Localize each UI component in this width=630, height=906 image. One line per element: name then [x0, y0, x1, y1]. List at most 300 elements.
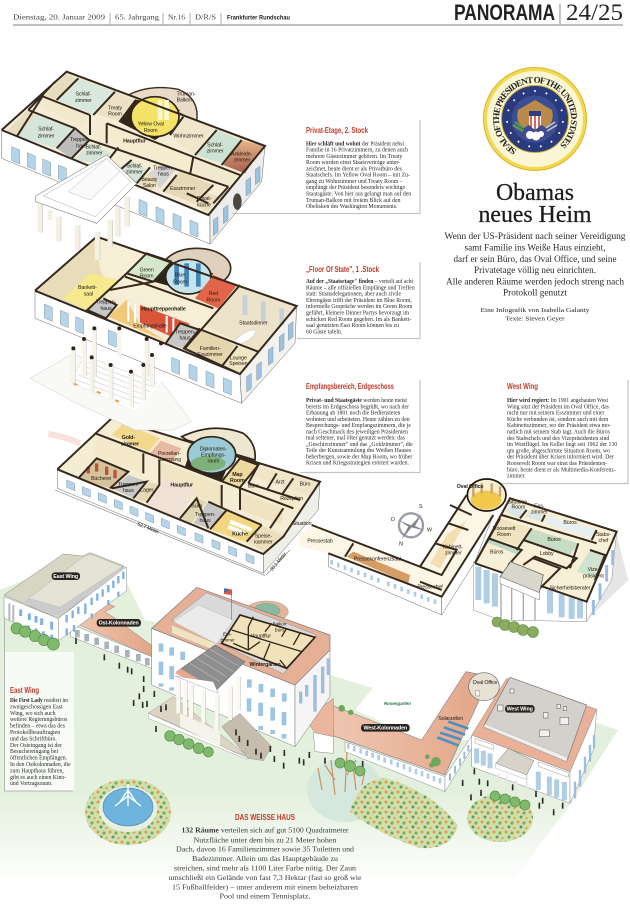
body text Privat-Etage: Truman-Balkon mit freiem Blick auf den — [306, 197, 401, 204]
East Wing building — [4, 553, 153, 668]
floor-2 room labels: Ankleide- — [231, 152, 253, 158]
west wing room labels: Situation — [508, 499, 527, 505]
west colonnade junction roof — [306, 698, 333, 737]
round flower bed by West Wing — [467, 791, 533, 842]
body text West Wing: natlich mit seinem Stab tagt. Auch die Büros — [507, 430, 611, 436]
floor-2 rooms — [7, 73, 263, 212]
heading Privat-Etage: Privat-Etage, 2. Stock — [306, 125, 368, 135]
portico — [175, 645, 245, 730]
compass letters: W — [427, 528, 433, 534]
map room — [222, 458, 258, 487]
pink shadow stripes — [48, 434, 80, 443]
title: neues Heim — [478, 202, 592, 228]
floor-1 room labels: Red — [209, 291, 218, 297]
floor-2 room labels: Beauty — [141, 177, 158, 183]
floor-1 room labels: Bankett- — [78, 285, 97, 291]
balcony arc — [182, 428, 255, 460]
ground-floor room labels: Bücherei — [91, 476, 111, 482]
credits — [480, 307, 590, 322]
floor-1 room labels — [78, 267, 268, 367]
intro text: Protokoll genutzt — [503, 288, 567, 298]
body text Empfangsbereich: Privat- und Staatsgäste werden heute meist — [306, 398, 407, 404]
corridor back rooms — [93, 437, 143, 473]
rear dome — [245, 601, 288, 622]
body text East Wing: Die First Lady residiert im — [10, 698, 68, 704]
east rooms — [248, 467, 320, 497]
floor-1 room labels: Blue — [175, 273, 185, 279]
west wing rooms — [505, 505, 527, 518]
floor-2 front wall — [2, 131, 210, 244]
floor-1 room labels: haus — [100, 306, 112, 312]
colonnade roof — [327, 672, 490, 775]
body text East Wing: und Vortragsraum. — [10, 781, 53, 787]
cutaway labels: Büro — [275, 628, 285, 633]
west wing room labels: Stabs- — [596, 532, 611, 538]
cross hall red carpet — [140, 305, 190, 336]
bare trees by the south lawn — [318, 752, 365, 795]
floor-2 room labels: haus — [76, 143, 88, 149]
entrance hall — [110, 277, 217, 328]
colonnade walls — [312, 495, 493, 597]
small room — [180, 498, 207, 523]
entrance ground plane — [30, 353, 192, 430]
ground-floor room labels: haus — [199, 518, 211, 524]
label: Rosengarten: Rosengarten — [384, 701, 411, 706]
label: Kabinettszimmer: Kabinett- — [443, 544, 463, 550]
label: West Wing: West Wing — [507, 707, 533, 713]
compass letters: S — [419, 504, 423, 510]
lawn — [0, 565, 618, 885]
west wing roof base — [472, 678, 597, 772]
west wing tall windows — [477, 748, 564, 800]
floor-2 room labels: Schlaf- — [207, 142, 223, 148]
body text Empfangsbereich: wohnten und arbeiteten. Heute zählen zu den — [306, 417, 410, 423]
colonnade arcade — [71, 624, 152, 668]
ground-floor front wall — [57, 469, 263, 573]
body text Floor of State: Ehrengäste trifft der Präsident im Blue Room, — [306, 297, 412, 304]
floor-2 room labels: Wohnzimmer — [173, 133, 204, 139]
floor-1 room labels: Treppen- — [96, 300, 117, 306]
floor-2 side wall — [210, 146, 265, 244]
small kitchen — [223, 346, 257, 374]
dimension: building width: 30,1 Meter — [269, 551, 288, 573]
body text Empfangsbereich: „Geschirrzimmer" und das „Goldzimmer", die — [306, 442, 413, 448]
newspaper header — [13, 0, 623, 25]
west wing room labels: Roosevelt — [493, 526, 516, 532]
floor-2 room labels: Truman- — [176, 91, 196, 97]
body text Das Weisse Haus: Nutzfläche unter dem bis zu 21 Meter hohen — [194, 835, 337, 844]
floor-1 room labels: Lounge — [230, 355, 247, 361]
body text Das Weisse Haus: Badezimmer. Allein um das Hauptgebäude zu — [192, 854, 338, 863]
west wing room labels: Büros — [547, 537, 561, 543]
ground-floor room labels: zimmer — [121, 441, 139, 447]
west wing room labels: zimmer — [531, 509, 548, 515]
bottom text block — [168, 812, 362, 901]
body text Privat-Etage: Room wurden einst Staatsverträge unter- — [306, 160, 400, 166]
kitchen — [210, 510, 262, 542]
label: Oval Office: Oval Office — [457, 484, 483, 490]
body text Floor of State: geführt, kleinere Dinner Partys bevorzugt im — [306, 310, 410, 316]
oval office roof: Oval Office — [473, 680, 498, 686]
fountain flower bed — [85, 779, 171, 845]
seal lettering: SEAL OF THE PRESIDENT OF THE UNITED STATES — [493, 76, 577, 154]
body text West Wing: im Westflügel. Im Keller liegt seit 1962 der 130 — [507, 441, 617, 448]
floor plan: ground floor (Erdgeschoss) — [48, 418, 320, 576]
floor-2 room labels: Esszimmer — [170, 186, 196, 192]
header date line: Nr.16 — [168, 14, 185, 22]
colonnade side wall — [442, 515, 493, 615]
west wing room labels: Sicherheitsberater — [550, 585, 591, 591]
compass letters: O — [391, 517, 395, 523]
stair terraces — [148, 697, 248, 757]
floor-2 base — [2, 72, 265, 215]
west wing room labels: Büros — [563, 520, 577, 526]
dimension: building length: 52,7 Meter — [136, 521, 160, 536]
body text Floor of State — [306, 278, 415, 335]
balcony — [128, 88, 197, 122]
ground-floor room labels: Arzt — [276, 479, 285, 485]
heading East Wing: East Wing — [10, 685, 39, 695]
label: Pressestab: Pressestab — [307, 538, 333, 544]
heading Empfangsbereich: Empfangsbereich, Erdgeschoss — [306, 381, 394, 391]
main house front wall — [152, 628, 295, 747]
seal eagle — [513, 100, 557, 140]
floor-1 room labels: Room — [173, 279, 188, 285]
floor-2 room labels: Salon — [143, 183, 156, 189]
floor-1 room labels: Green — [140, 267, 154, 273]
label: Kabinett second line: zimmer — [445, 551, 462, 557]
second stair room — [193, 502, 225, 528]
ground-floor room labels: sammlung — [158, 457, 181, 463]
ground-floor room labels: Diplomaten- — [200, 447, 227, 453]
body text West Wing — [507, 398, 617, 480]
stair room — [112, 475, 147, 498]
ground-floor room labels: Gold- — [122, 435, 135, 441]
info box: West Wing — [500, 380, 628, 484]
floor-1 room labels: Haupttreppenhalle — [141, 306, 186, 312]
body text East Wing: weitere Regierungsbüros — [10, 717, 68, 723]
ground-floor room labels: Büro — [300, 482, 311, 488]
west wing room labels: Büros — [490, 550, 504, 556]
credits: Eine Infografik von Isabella Galanty — [480, 307, 590, 314]
body text West Wing: Hier wird regiert: Im 1901 angebauten West — [507, 398, 608, 404]
west colonnade junction wall — [313, 728, 333, 753]
south portico — [36, 155, 137, 260]
main house windows — [161, 643, 284, 739]
floor-2 room labels: Schlaf- — [127, 163, 143, 169]
ground-floor room labels: Küche — [232, 531, 248, 537]
label: Ost-Kolonnaden: Ost-Kolonnaden — [99, 621, 139, 627]
oval balcony — [163, 248, 231, 288]
north portico columns — [71, 326, 163, 407]
body text West Wing: Roosevelt Room war einst das Präsidenten- — [507, 461, 607, 467]
body text West Wing: der Präsident über Krisen informiert wird. Der — [507, 454, 614, 461]
ground-floor room labels: Hauptflur — [170, 483, 193, 489]
fountain spray — [115, 784, 141, 806]
floor-1 room labels: Esszimmer — [197, 352, 223, 358]
body text Privat-Etage: zeichnet, heute dient er als Privatbüro des — [306, 166, 403, 172]
floor-2 front windows — [12, 147, 198, 237]
label: Pressechef: Pressechef — [417, 585, 443, 591]
heading West Wing: West Wing — [507, 381, 538, 391]
colonnade roof — [72, 600, 153, 657]
west wing room labels: Room — [511, 505, 526, 511]
body text East Wing: In den Ostkolonnaden, die — [10, 762, 71, 768]
dimension: building length — [55, 490, 265, 576]
oval office — [467, 479, 506, 511]
ground-floor room labels: Situation — [292, 521, 312, 527]
floor-1 room labels: Familien- — [200, 346, 221, 352]
diplomatic reception oval — [188, 437, 236, 473]
floor-1 base — [35, 237, 297, 374]
body text Empfangsbereich: Erbauung ab 1801 noch die Bediensteten — [306, 410, 400, 416]
floor-2 room labels: Privat- — [197, 196, 212, 202]
floor-2 room labels: haus — [158, 172, 169, 178]
floor-1 room labels: Room — [206, 298, 221, 304]
visitors near the West Wing — [362, 761, 564, 815]
page numbers: 24/25 — [566, 0, 623, 25]
body text Privat-Etage: empfängt der Präsident besonders wichtige — [306, 184, 405, 191]
floor-1 front windows — [44, 304, 231, 395]
body text Das Weisse Haus: umschließt ein Gelände von fast 7,3 Hektar (fast so groß wie — [168, 873, 362, 882]
ground-floor room labels: Porzellan- — [158, 451, 181, 457]
body text East Wing: zweigeschossigen East — [10, 704, 63, 710]
floor-1 side wall — [240, 306, 297, 403]
body text Empfangsbereich: Besprechungs- und Empfangszimmern, die je — [306, 422, 411, 429]
floor-2 room labels: Treppen- — [70, 137, 91, 143]
floor-2 room labels: zimmer — [233, 158, 250, 164]
roof trees — [338, 705, 441, 768]
green room — [128, 253, 172, 282]
kitchen room — [430, 520, 467, 568]
large south flower bed — [350, 778, 458, 848]
floor-2 room labels: Balkon — [177, 97, 192, 103]
body text West Wing: büro, heute dient er als Multimedia-Konferenz- — [507, 466, 616, 473]
dark lobby wedge — [153, 262, 213, 293]
intro text: Wenn der US-Präsident nach seiner Vereidigung — [444, 231, 626, 242]
icon: presidential seal — [483, 67, 587, 171]
body text Empfangsbereich: Krisen und Kriegsstrategien erörtert wurden. — [306, 461, 410, 467]
hauptflur floor — [147, 478, 197, 518]
ground-floor windows — [67, 480, 254, 564]
west wing room labels: Room — [497, 532, 512, 538]
west wing walls — [475, 498, 617, 602]
dimension: building width — [266, 550, 290, 575]
north entrance stairs — [70, 353, 163, 412]
info box: Floor of State — [297, 262, 420, 338]
body text East Wing: und das Schriftbüro. — [10, 735, 57, 742]
yellow oval room — [131, 97, 179, 137]
body text Empfangsbereich: beherbergen, sowie der Map Room, wo früher — [306, 454, 412, 460]
body text East Wing — [10, 698, 71, 787]
body text East Wing: Protokollbeauftragten — [10, 729, 60, 736]
West colonnade and West Wing building — [327, 672, 597, 803]
floor-2 room labels — [38, 91, 253, 208]
body text Empfangsbereich: nach Geschmack des jeweiligen Präsidenten — [306, 429, 408, 435]
body text Floor of State: statt: Staatsdelegationen, aber auch zivile — [306, 292, 401, 298]
body text Das Weisse Haus: Pool und einem Tennisplatz. — [220, 892, 311, 901]
body text Empfangsbereich — [306, 398, 413, 467]
floor-2 room labels: zimmer — [207, 149, 224, 155]
cutaway labels: Balkon — [273, 621, 287, 626]
label: Pressekonferenzsaal: Pressekonferenzsaal — [354, 556, 401, 562]
body text Privat-Etage: Staatsgäste. Von hier aus gelangt man auf den — [306, 190, 411, 198]
floor plan: Floor of State, 1. Stock — [30, 237, 297, 430]
ground-floor room labels: Büro — [191, 504, 202, 510]
seal stars — [506, 90, 564, 148]
ground-floor room labels: Treppen- — [118, 482, 139, 488]
floor-1 room labels: Speisen — [229, 361, 248, 367]
floor-2 room labels: Schlaf- — [76, 92, 92, 98]
boiler room — [135, 482, 159, 503]
body text West Wing: des Stabschefs und des Vizepräsidenten sind — [507, 435, 609, 442]
colonnade windows — [332, 560, 435, 604]
east wing side wall — [58, 567, 127, 641]
body text Privat-Etage: Obelisken des Washington Monuments. — [306, 204, 398, 210]
west wing room labels: Lobby — [540, 551, 554, 557]
body text Empfangsbereich: Teile der Kunstsammlung des Weißen Hauses — [306, 447, 412, 454]
body text Das Weisse Haus: 132 Räume verteilen sich auf gut 5100 Quadratmeter — [182, 826, 349, 835]
blue room — [166, 259, 211, 294]
east wing hedges — [11, 623, 59, 650]
colonnade front wall — [328, 553, 442, 615]
hedge near trees — [335, 758, 365, 776]
ground-floor base — [57, 418, 320, 554]
info box: Empfangsbereich — [300, 380, 420, 472]
ground-floor room labels: Map — [232, 472, 243, 478]
floor-2 room labels: zimmer — [86, 151, 103, 157]
floor-1 walls — [35, 237, 297, 374]
floor-2 room labels: Schlaf- — [86, 144, 102, 150]
pantry — [247, 525, 283, 553]
body text Floor of State: 60 Gäste tafeln. — [306, 328, 343, 335]
section title: PANORAMA — [454, 0, 555, 25]
ground-floor room labels: haus — [123, 488, 134, 494]
floor-2 room labels: Schlaf- — [38, 127, 54, 133]
body text East Wing: öffentlichen Empfängen. — [10, 755, 68, 762]
cutaway labels: Hauptflur — [250, 634, 271, 640]
ground-floor room labels: kammer — [254, 540, 273, 546]
label: Solarzellen: Solarzellen — [438, 716, 463, 722]
floor-2 room labels: zimmer — [126, 169, 143, 175]
floor-2 room labels: zimmer — [38, 133, 55, 139]
body text Das Weisse Haus: 15 Fußballfelder) – unter anderem mit einem beheizbaren — [172, 882, 358, 891]
body text Empfangsbereich: bereits im Erdgeschoss begrüßt, wo nach der — [306, 403, 409, 410]
body text Floor of State: saal genutzten East Room können bis zu — [306, 323, 399, 329]
east wing front wall — [4, 597, 58, 641]
goldzimmer — [112, 423, 160, 452]
main house roof — [152, 587, 330, 685]
body text East Wing: gibt es auch einen Kino- — [10, 775, 66, 781]
ground-floor room labels: Room — [230, 478, 245, 484]
floor-1 room labels: haus — [179, 335, 191, 341]
west wing portico — [500, 562, 543, 593]
body text Das Weisse Haus: streichen, sind mehr als 1100 Liter Farbe nötig. Der Zaun — [174, 864, 356, 873]
west wing portico — [496, 748, 534, 802]
dark vestibule — [185, 442, 233, 481]
west wing room labels — [490, 499, 611, 591]
body text Privat-Etage: Staatschefs. Im Yellow Oval Room – mit Zu- — [306, 172, 410, 179]
title — [478, 180, 592, 228]
inner roof — [172, 593, 317, 674]
west wing roof — [483, 677, 587, 762]
intro text: Privatetage völlig neu einrichten. — [474, 265, 596, 276]
body text Privat-Etage: Familie in 16 Privatzimmern, zu denen auch — [306, 148, 408, 154]
entrance floor — [108, 300, 167, 342]
floor-2 room labels: Room — [144, 128, 158, 134]
floor-1 side windows — [247, 322, 293, 392]
body text East Wing: zum Haupthaus führen, — [10, 767, 64, 774]
west wing windows — [478, 567, 580, 619]
body text Floor of State: schicken Red Room gegeben. Im als Bankett- — [306, 317, 411, 323]
floor-1 room labels: saal — [84, 291, 93, 297]
cutaway labels — [220, 621, 287, 642]
header date line: D/R/S — [195, 14, 216, 22]
body text East Wing: Wing, wo sich auch — [10, 711, 56, 717]
press staircase — [347, 552, 410, 583]
roof vents — [498, 689, 569, 737]
ground-floor room labels: Büro — [248, 483, 259, 489]
ground-floor room labels: Lager — [140, 488, 154, 494]
ground-floor room labels — [91, 435, 312, 546]
stair rooms — [88, 298, 117, 318]
floor-2 room labels: Room — [108, 112, 123, 118]
body text West Wing: Küche verbunden ist, sondern auch mit dem — [507, 417, 609, 423]
body text Floor of State: Auf der „Staatsetage" finden – verteilt auf acht — [306, 278, 413, 285]
visitors on the lawn — [75, 638, 326, 769]
west wing shadow — [587, 535, 628, 618]
body text West Wing: qm große, abgeschirmte Situation Room, wo — [507, 447, 610, 454]
intro text: Alle anderen Räume werden jedoch streng nach — [446, 276, 624, 288]
floor-1 room labels: Treppen- — [175, 329, 196, 335]
label: East Wing: East Wing — [53, 574, 78, 580]
body text West Wing: Wing sitzt der Präsident im Oval Office, das — [507, 403, 610, 410]
header date line: 65. Jahrgang — [115, 14, 159, 22]
body text Privat-Etage: gang zu Wohnzimmer und Treaty Room – — [306, 179, 403, 185]
china room — [150, 441, 182, 462]
floor-2 room labels: Treaty — [108, 105, 123, 111]
body text East Wing: Besuchereingang bei — [10, 749, 58, 755]
pale shaded ground — [307, 758, 383, 822]
intro text: darf er sein Büro, das Oval Office, und seine — [454, 254, 616, 265]
ground-floor side wall — [263, 482, 320, 573]
credits: Texte: Steven Geyer — [506, 316, 565, 322]
label: East Wing — [52, 572, 80, 580]
hedge of the round bed — [490, 791, 530, 810]
ground-floor room labels: Treppen- — [195, 512, 216, 518]
floor-2 walls — [2, 72, 265, 215]
state dining room — [203, 285, 297, 352]
oval office roof — [469, 673, 499, 701]
solar panels — [437, 722, 468, 745]
floor-1 front wall — [35, 291, 242, 403]
body text Das Weisse Haus: Dach, davon 16 Familienzimmer sowie 35 Toiletten und — [176, 845, 354, 854]
west wing room labels: Vize- — [588, 567, 599, 573]
label: Wintergarten: Wintergarten — [249, 662, 281, 668]
intro text — [444, 231, 626, 298]
second-floor cutaway — [222, 615, 315, 668]
body text Floor of State: informelle Gespräche werden im Green Room — [306, 303, 413, 310]
compass letters: N — [399, 541, 403, 547]
floor-1 room labels: Staatsdinner — [239, 321, 268, 327]
body text Empfangsbereich: mal seltener, mal öfter genutzt werden: das — [306, 435, 406, 442]
body text West Wing: Kabinettszimmer, wo der Präsident etwa mo- — [507, 423, 611, 429]
floor plan: Privat-Etage, 2. Stock — [2, 72, 265, 260]
east wing roof — [4, 553, 124, 618]
body text East Wing: Der Osteingang ist der — [10, 743, 62, 749]
banquet hall walls and floor — [35, 237, 147, 310]
flag — [224, 588, 232, 620]
